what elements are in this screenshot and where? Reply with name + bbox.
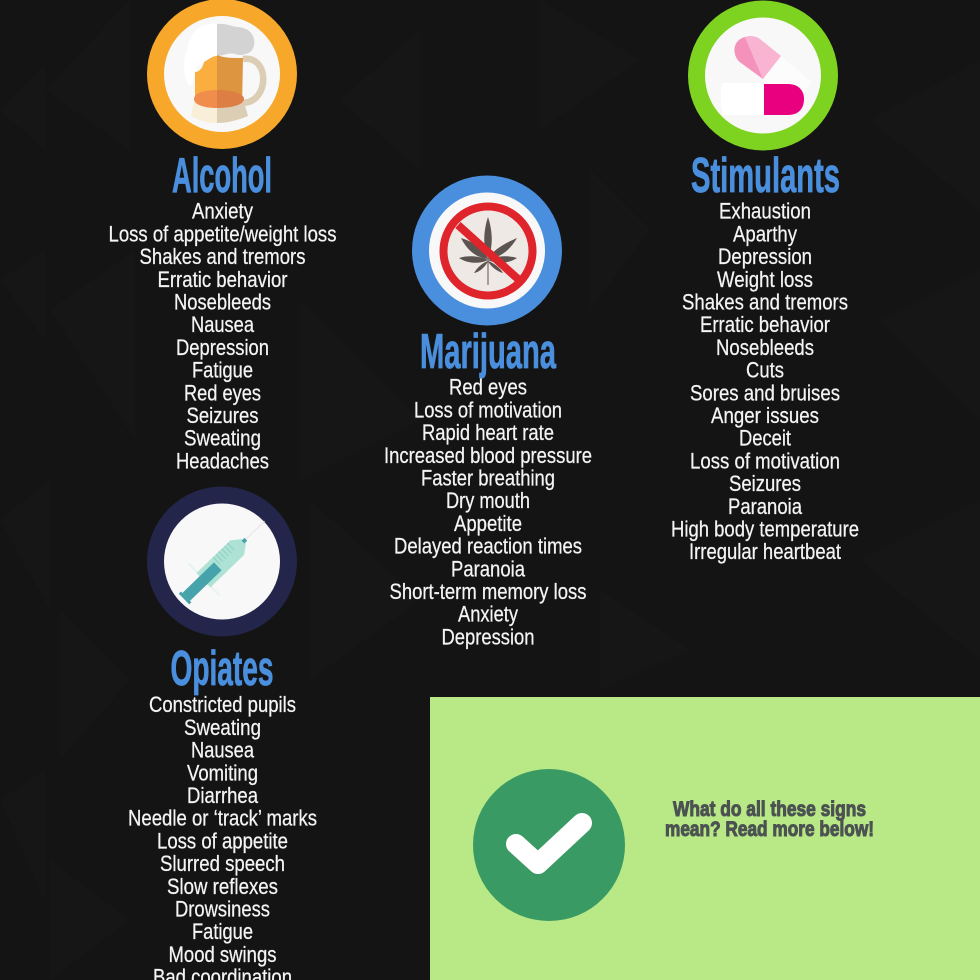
list: opiate symptoms: Fatigue — [192, 919, 253, 944]
list: alcohol symptoms: Nosebleeds — [174, 289, 271, 314]
list: alcohol symptoms: Depression — [176, 335, 269, 360]
list: stimulant symptoms: Exhaustion — [719, 199, 811, 224]
list: alcohol symptoms: Shakes and tremors — [140, 244, 306, 269]
heading: Alcohol: Alcohol — [172, 149, 272, 203]
list: marijuana symptoms: Anxiety — [458, 602, 518, 627]
list: stimulant symptoms: Cuts — [746, 358, 784, 383]
list: stimulant symptoms: Depression — [718, 244, 812, 269]
list: marijuana symptoms: Dry mouth — [446, 488, 530, 513]
heading: Opiates: Opiates — [170, 642, 274, 696]
list: opiate symptoms: Vomiting — [187, 760, 258, 785]
list: stimulant symptoms: Anger issues — [711, 403, 819, 428]
list: stimulant symptoms: Loss of motivation — [690, 448, 840, 473]
list: stimulant symptoms: Erratic behavior — [700, 312, 830, 337]
list: alcohol symptoms: Loss of appetite/weight loss — [108, 221, 336, 246]
list: alcohol symptoms: Headaches — [176, 448, 269, 473]
list: alcohol symptoms: Nausea — [191, 312, 255, 337]
icon: check mark — [473, 769, 625, 921]
list: stimulant symptoms: Sores and bruises — [690, 380, 840, 405]
list: marijuana symptoms: Increased blood pressure — [384, 443, 592, 468]
list: opiate symptoms: Drowsiness — [175, 896, 270, 921]
callout text: What do all these signs — [673, 798, 866, 821]
icon: pills — [688, 0, 838, 150]
list: stimulant symptoms: Irregular heartbeat — [689, 539, 841, 564]
list: marijuana symptoms: Delayed reaction times — [394, 534, 582, 559]
list: stimulant symptoms: Weight loss — [717, 267, 813, 292]
icon: no marijuana sign — [412, 176, 562, 326]
list: stimulant symptoms: Deceit — [739, 426, 791, 451]
list: marijuana symptoms: Depression — [442, 624, 534, 649]
list: marijuana symptoms: Paranoia — [451, 556, 526, 581]
list: opiate symptoms: Needle or ‘track’ marks — [128, 806, 317, 831]
list: alcohol symptoms — [108, 199, 336, 473]
list: stimulant symptoms: Shakes and tremors — [682, 289, 848, 314]
list: stimulant symptoms: High body temperature — [671, 516, 859, 541]
list: alcohol symptoms: Seizures — [186, 403, 258, 428]
list: opiate symptoms: Diarrhea — [187, 783, 259, 808]
panel: call to action — [430, 697, 980, 980]
list: alcohol symptoms: Sweating — [184, 426, 261, 451]
list: marijuana symptoms: Loss of motivation — [414, 397, 562, 422]
list: opiate symptoms: Sweating — [184, 715, 261, 740]
list: marijuana symptoms: Rapid heart rate — [422, 420, 554, 445]
heading: Marijuana: Marijuana — [420, 325, 556, 379]
list: alcohol symptoms: Erratic behavior — [158, 267, 288, 292]
list: alcohol symptoms: Red eyes — [184, 380, 261, 405]
icon: beer mug — [147, 0, 297, 149]
list: stimulant symptoms: Nosebleeds — [716, 335, 814, 360]
list: marijuana symptoms: Short-term memory loss — [390, 579, 586, 604]
list: opiate symptoms: Constricted pupils — [149, 692, 296, 717]
list: opiate symptoms: Mood swings — [168, 942, 276, 967]
list: alcohol symptoms: Fatigue — [192, 358, 253, 383]
callout text: mean? Read more below! — [665, 818, 874, 841]
icon: syringe — [147, 486, 297, 636]
list: marijuana symptoms — [384, 375, 592, 649]
list: alcohol symptoms: Anxiety — [192, 199, 253, 224]
list: marijuana symptoms: Faster breathing — [421, 465, 555, 490]
list: stimulant symptoms: Seizures — [729, 471, 801, 496]
callout text — [665, 798, 874, 841]
list: stimulant symptoms: Aparthy — [733, 221, 797, 246]
list: opiate symptoms: Slurred speech — [160, 851, 285, 876]
list: stimulant symptoms: Paranoia — [728, 494, 803, 519]
list: opiate symptoms: Nausea — [191, 738, 255, 763]
list: marijuana symptoms: Red eyes — [449, 375, 527, 400]
list: opiate symptoms: Loss of appetite — [157, 828, 288, 853]
heading: Stimulants: Stimulants — [691, 149, 840, 203]
list: marijuana symptoms: Appetite — [454, 511, 522, 536]
list: opiate symptoms — [128, 692, 317, 980]
list: opiate symptoms: Slow reflexes — [167, 874, 278, 899]
list: stimulant symptoms — [671, 199, 859, 564]
